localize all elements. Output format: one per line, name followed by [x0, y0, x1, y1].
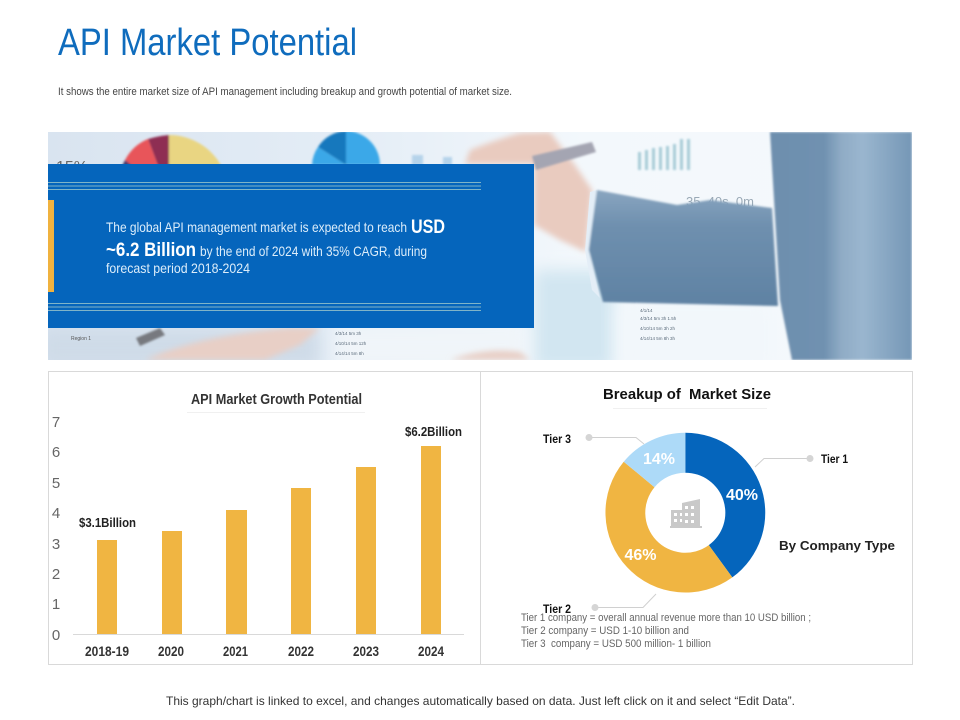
y axis labels: 5 — [52, 475, 60, 492]
data labels: $3.1Billion — [79, 515, 136, 530]
data labels — [79, 424, 462, 530]
icon: building — [670, 499, 702, 528]
donut segments — [685, 433, 765, 577]
x axis labels: 2023 — [353, 644, 379, 659]
percent labels: 14% — [643, 451, 675, 468]
y axis labels: 7 — [52, 414, 60, 431]
tier labels — [543, 434, 849, 616]
x axis labels: 2022 — [288, 644, 314, 659]
tier definitions: Tier 1 company = overall annual revenue more than 10 USD billion ; — [521, 612, 811, 624]
y axis labels: 6 — [52, 444, 60, 461]
banner photo: 4/10/14 5m 12h — [335, 341, 367, 346]
x axis labels: 2024 — [418, 644, 444, 659]
callout text: The global API management market is expected to reach — [106, 219, 407, 235]
banner photo: 4/14/14 5m 8h — [335, 351, 364, 356]
percent labels — [624, 451, 758, 564]
y axis labels: 2 — [52, 566, 60, 583]
tier labels: Tier 2 — [543, 604, 571, 616]
x axis labels: 2018-19 — [85, 644, 129, 659]
y axis labels — [52, 414, 60, 644]
x axis labels: 2021 — [223, 644, 248, 659]
callout text: ~6.2 Billion — [106, 240, 196, 261]
percent labels: 46% — [624, 547, 657, 564]
callout text: USD — [411, 217, 445, 238]
chart title: API Market Growth Potential — [191, 391, 362, 408]
banner photo: 4/14/14 5m 8h 3h — [640, 336, 676, 341]
banner photo: 15% — [56, 159, 88, 176]
banner photo: 35 40s 0m — [686, 194, 754, 209]
banner photo: 4/3/14 5m 3h 1.5h — [640, 316, 677, 321]
banner photo — [48, 132, 912, 360]
callout: market forecast — [48, 164, 534, 328]
bars — [97, 446, 441, 634]
accent bar — [48, 200, 54, 292]
tier labels: Tier 1 — [821, 454, 849, 466]
data labels: $6.2Billion — [405, 424, 462, 439]
y axis labels: 3 — [52, 536, 60, 553]
x axis labels — [85, 644, 444, 659]
tier definitions — [521, 612, 811, 650]
chart title: Breakup of Market Size — [603, 387, 771, 403]
callout text: forecast period 2018-2024 — [106, 260, 250, 276]
tier labels: Tier 3 — [543, 434, 571, 446]
donut chart: breakup of market size — [521, 387, 895, 650]
x axis labels: 2020 — [158, 644, 184, 659]
bar chart: API market growth — [52, 391, 464, 659]
panel: charts frame — [48, 371, 913, 665]
percent labels: 40% — [726, 487, 758, 504]
tier definitions: Tier 2 company = USD 1-10 billion and — [521, 625, 689, 637]
callout text: by the end of 2024 with 35% CAGR, during — [200, 243, 427, 259]
leader lines — [589, 438, 810, 608]
callout text — [106, 217, 445, 276]
banner photo: 4/3/14 5m 3h — [335, 331, 362, 336]
banner photo: Region 1 — [71, 336, 91, 342]
y axis labels: 4 — [52, 505, 60, 522]
tier definitions: Tier 3 company = USD 500 million- 1 billion — [521, 638, 711, 650]
banner photo: 4/10/14 5m 3h 2h — [640, 326, 676, 331]
by company type: By Company Type — [779, 538, 895, 553]
banner photo: 4/1/14 — [640, 308, 653, 313]
footer note: This graph/chart is linked to excel, and changes automatically based on data. Just left click on it and select “Edit Data”. — [166, 694, 795, 708]
y axis labels: 1 — [52, 596, 60, 613]
y axis labels: 0 — [52, 627, 60, 644]
